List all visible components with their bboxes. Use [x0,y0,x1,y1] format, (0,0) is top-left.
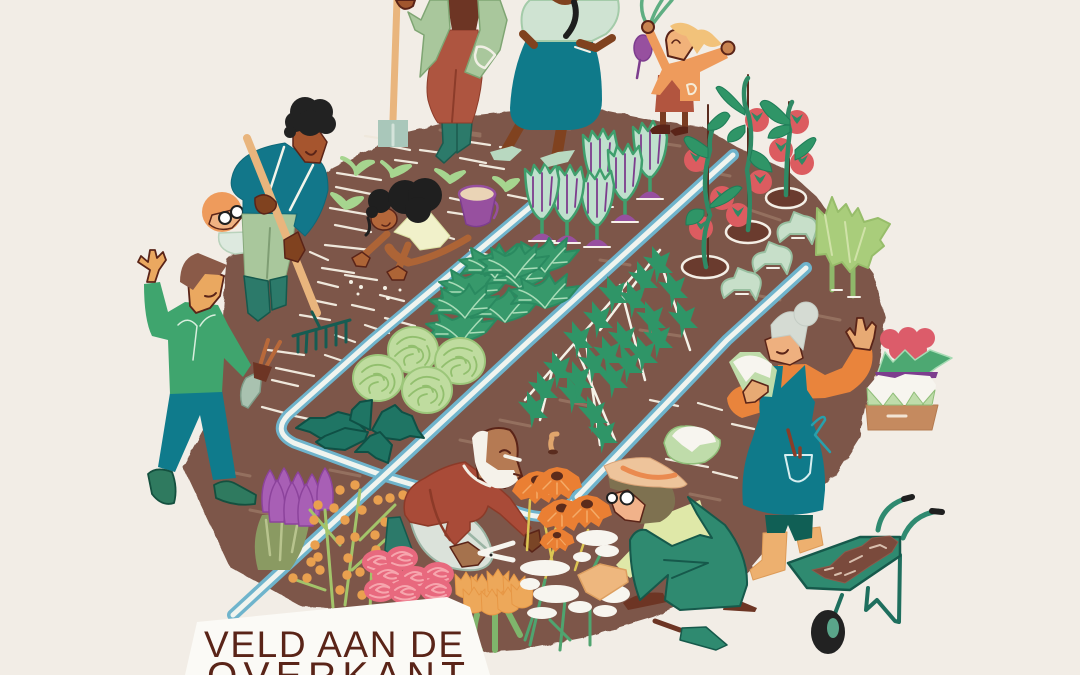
collar [178,315,215,360]
shovel [378,0,408,147]
shoes [650,125,688,136]
soil crayon streaks [220,125,850,540]
blouse [522,0,619,41]
cauliflower on ground [664,426,720,464]
hand [252,238,265,255]
trousers [427,30,482,123]
hair [608,474,675,524]
shirt [219,232,250,254]
woman with apron [727,302,876,580]
limbs [362,234,468,270]
purple vegetables [875,372,938,380]
boots [750,527,823,580]
raised left arm [650,33,668,72]
legs [663,110,685,127]
trousers [242,213,296,280]
boots [436,122,472,163]
arms on hips [523,34,612,48]
woman in teal skirt [490,0,619,167]
boot [385,517,416,562]
crate [866,405,938,430]
trousers [410,518,493,570]
cauliflowers [867,374,936,405]
overalls [630,497,747,610]
raised hand [138,250,166,282]
kale [426,238,579,342]
face [209,208,244,229]
child holding beet [634,0,734,136]
white flowers [520,530,630,650]
dark leafy plant [296,400,424,463]
child with glasses behind man [202,192,265,255]
trousers [765,515,813,541]
shirt [616,500,712,578]
pipe: left loop [281,203,577,517]
sweater [770,345,873,400]
hair [366,178,442,235]
beet [634,0,672,78]
hair [180,253,227,290]
upper hand [255,195,276,214]
pocket [785,455,812,482]
hat [604,458,687,488]
red tomatoes [880,327,935,360]
soil [812,536,898,583]
gloves [578,564,628,600]
sweater [404,462,531,545]
head [188,268,224,313]
irrigation pipes [233,155,806,615]
label background [185,597,490,675]
near hand [743,380,768,403]
top [447,0,482,30]
bean trellis [518,246,698,454]
rake head [293,312,350,352]
old man with scissors [385,428,541,570]
title label [185,597,490,675]
shoes [148,469,256,505]
coat [651,47,728,101]
neck [552,0,578,5]
girl crawling [349,178,468,300]
hand trowel [241,340,280,408]
hand [396,0,415,9]
hair and bun [771,312,808,350]
tulips [455,569,533,650]
woman with shovel [378,0,507,163]
legs [828,555,900,632]
pipe: right [577,268,806,497]
vegetable basket [866,327,952,430]
collar [464,466,490,486]
title text: VELD AAN DE [204,624,463,665]
cauliflower held [729,352,777,397]
boots [244,276,287,321]
seedlings [332,158,518,208]
shoes [623,592,757,612]
leaves [878,350,952,376]
fists [642,21,734,54]
head [293,130,327,163]
hair [284,97,336,138]
earthworm [548,434,558,454]
seeds [349,280,402,300]
tomato plants [682,75,816,278]
apron [742,365,825,515]
straps [270,147,313,210]
face [609,490,645,522]
head [765,328,803,365]
rake handle [247,138,317,313]
beet plants [525,121,667,247]
planting rings [682,188,806,278]
tray [788,537,900,590]
hand and scissors [450,542,513,567]
white hair and beard [472,431,518,488]
shirt [394,212,450,250]
hand trowel on ground [655,621,727,650]
mimosa flowers [288,480,408,610]
purple flowers [255,468,333,570]
hair [202,192,242,232]
pipe: middle long [233,155,733,615]
gardener with hat [578,458,757,612]
man with rake [231,97,350,352]
sweater [144,282,251,394]
wheel [811,610,845,654]
cabbages [353,327,485,413]
soil field [183,108,885,652]
legs [506,122,562,155]
cardigan [408,0,507,78]
skirt [510,40,602,130]
face [371,208,397,230]
lower hand [284,232,305,262]
pink roses [362,546,454,604]
green leafy plants [816,197,890,297]
wheelbarrow [788,497,942,654]
head and hair [666,23,722,60]
sandals [490,146,575,167]
pale lettuce [722,212,817,300]
bucket [459,186,498,227]
far hand [524,530,541,552]
furrow lines [262,136,754,478]
head [474,428,522,488]
handles [878,497,942,538]
glasses [607,492,634,504]
apron bow [812,417,830,452]
sweater [231,143,328,236]
braid [566,2,576,36]
rudbeckia flowers [512,467,612,590]
hands [352,252,407,280]
glasses [219,206,243,224]
raised hand [846,318,876,350]
legs [158,390,236,480]
dress [655,75,694,112]
man waving [138,250,280,505]
